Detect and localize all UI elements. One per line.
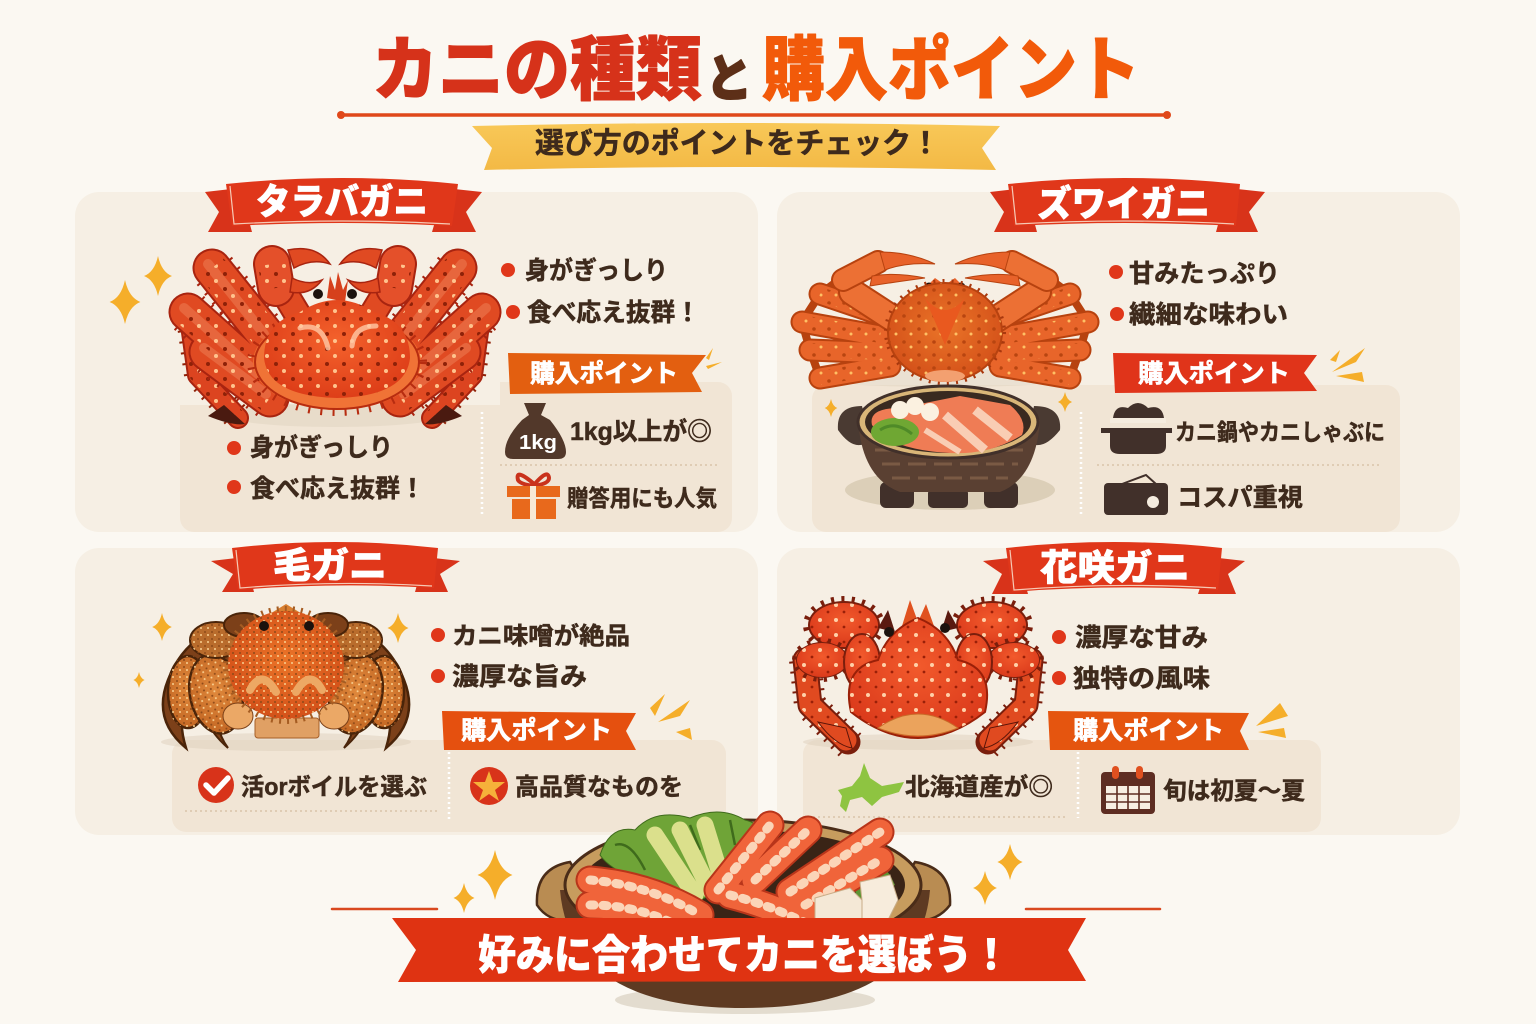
bullets: 甘みたっぷり (1129, 260, 1280, 288)
icon: burst (650, 694, 692, 740)
purchase ribbon (1048, 711, 1249, 750)
icon: star (470, 767, 508, 805)
panel: 花咲ガニ (777, 542, 1460, 835)
title: 購入ポイント (762, 31, 1140, 109)
bullets (1052, 624, 1210, 693)
bullets: upper (501, 256, 700, 327)
purchase ribbon (442, 711, 636, 750)
icon: burst (1256, 703, 1288, 738)
text: 旬: 旬は初夏～夏 (1163, 778, 1305, 805)
text: 活orボイル: 活orボイルを選ぶ (241, 774, 427, 801)
closing banner (392, 918, 1086, 982)
icon: burst (1330, 348, 1365, 382)
purchase ribbon (508, 353, 706, 394)
heading ribbon: 花咲ガニ (1040, 547, 1190, 588)
icon: check (198, 767, 234, 803)
purchase ribbon: 購入ポイント (1138, 360, 1290, 388)
icon: gift (507, 474, 560, 519)
icon: 北海道 (838, 763, 904, 812)
bullets: 濃厚な旨み (452, 663, 587, 691)
purchase ribbon (1113, 353, 1317, 393)
purchase ribbon: 購入ポイント (530, 360, 678, 388)
icon: sparkles right (973, 844, 1023, 905)
title underline (337, 111, 1171, 119)
icon: sparkles (110, 256, 172, 324)
closing side lines (332, 908, 1160, 910)
illustration: 土鍋 (838, 386, 1060, 510)
purchase box (812, 385, 1400, 532)
text: 1kg以上: 1kg以上が◎ (570, 417, 712, 446)
bullets: lower: 身がぎっしり (250, 433, 393, 462)
title: カニの種類 (372, 31, 702, 109)
icon: sparkles left (454, 850, 512, 913)
icon: sparkles (133, 613, 408, 688)
heading ribbon: ズワイガニ (1037, 183, 1210, 224)
subtitle ribbon: 選び方のポイントをチェック！ (535, 127, 940, 160)
illustration: 毛ガニ (161, 604, 411, 751)
text: 高品質: 高品質なものを (515, 774, 683, 801)
illustration: 花咲ガニ (796, 600, 1040, 750)
icon: calendar (1101, 766, 1155, 814)
purchase box (172, 740, 726, 832)
bullets: カニ味噌が絶品 (452, 622, 630, 650)
text: コスパ: コスパ重視 (1177, 484, 1303, 512)
panel: 毛ガニ (75, 542, 758, 835)
title (372, 31, 1140, 109)
purchase ribbon: 購入ポイント (461, 717, 612, 745)
icon: pot (1101, 403, 1172, 454)
bullets: upper: 食べ応え抜群！ (527, 299, 700, 327)
purchase box (180, 382, 732, 532)
text: 鍋: カニ鍋やカニしゃぶに (1175, 419, 1385, 445)
icon: burst (706, 348, 722, 369)
heading ribbon (983, 542, 1245, 594)
icon: wallet (1104, 475, 1168, 515)
illustration: カニ鍋 (537, 812, 950, 1014)
heading ribbon (205, 178, 482, 232)
bullets: 独特の風味 (1073, 665, 1210, 693)
illustration: ズワイガニ (802, 252, 1088, 387)
bullets: 繊細な味わい (1129, 301, 1288, 329)
text: 北海道: 北海道産が◎ (905, 773, 1053, 801)
panel: ズワイガニ (777, 178, 1460, 532)
heading ribbon (990, 178, 1265, 232)
bullets (1109, 260, 1288, 329)
bullets: 濃厚な甘み (1075, 624, 1208, 652)
heading ribbon: タラバガニ (256, 181, 428, 222)
illustration: タラバガニ (184, 249, 486, 427)
closing banner: 好みに合わせてカニを選ぼう！ (478, 932, 1010, 978)
heading ribbon: 毛ガニ (273, 545, 387, 586)
panel: タラバガニ (75, 178, 758, 532)
heading ribbon (211, 542, 460, 592)
bullets (431, 622, 630, 691)
title: と (706, 51, 752, 107)
subtitle ribbon (472, 123, 1000, 170)
bullets: lower: 食べ応え抜群！ (250, 475, 425, 503)
purchase box (803, 740, 1321, 832)
icon: 1kg bag: 1kg (519, 432, 557, 454)
bullets: lower (227, 433, 425, 503)
icon: sparkles (825, 392, 1072, 417)
text: gift: 贈答用にも人気 (567, 485, 717, 511)
purchase ribbon: 購入ポイント (1073, 717, 1224, 745)
bullets: upper: 身がぎっしり (525, 256, 668, 285)
icon: 1kg bag (505, 403, 566, 459)
